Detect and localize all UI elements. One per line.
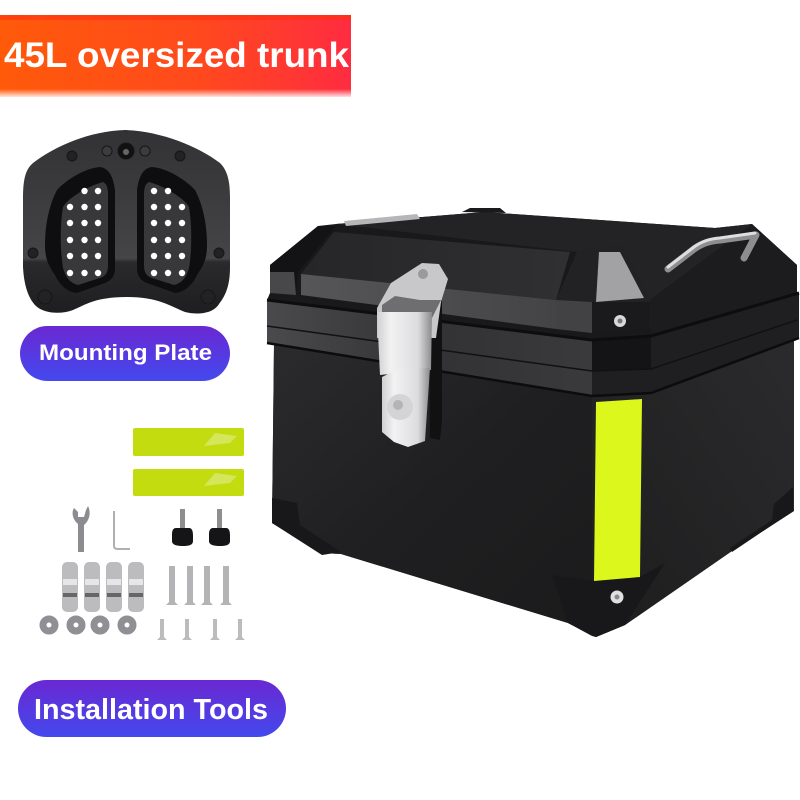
lid left corner: [270, 226, 336, 295]
yellow reflective strip: [594, 399, 642, 581]
lid side: [650, 224, 797, 335]
trunk body side: [592, 338, 794, 637]
lid corner wedge: [556, 246, 651, 333]
latch: [377, 263, 448, 447]
icon: nuts: [43, 619, 133, 631]
lid band: [267, 300, 592, 396]
top left handle: [344, 214, 420, 226]
lid top: [336, 212, 752, 300]
icon: wrench: [73, 506, 90, 552]
icon: keys: [172, 509, 230, 546]
icon: reflective stickers: [133, 428, 244, 496]
bottom corner guards: [272, 487, 793, 637]
trunk silhouette base: [267, 212, 799, 637]
icon: mounting plate: [23, 130, 230, 313]
right handle: [668, 233, 756, 269]
reflector: [596, 252, 644, 302]
label: Installation Tools: [18, 680, 286, 737]
plate bolts: [28, 143, 224, 304]
icon: allen key: [114, 511, 130, 549]
bottom screw: [610, 590, 624, 604]
banner: 45L oversized trunk: [0, 15, 351, 97]
lid screw: [614, 315, 626, 327]
top hinge: [462, 208, 506, 213]
label: Mounting Plate: [20, 326, 230, 381]
banner: 45L oversized trunk: 45L oversized trunk: [4, 36, 350, 75]
left recess: [45, 167, 115, 293]
icon: short screws: [157, 619, 245, 640]
lid front grey band: [301, 274, 556, 329]
icon: metal clips: [62, 562, 144, 612]
label: Installation Tools: Installation Tools: [34, 694, 268, 726]
icon: long screws: [166, 566, 232, 605]
label: Mounting Plate: Mounting Plate: [39, 340, 212, 365]
trunk body front: [272, 345, 592, 636]
plate perforation dots: [67, 188, 185, 276]
trunk: [267, 208, 799, 637]
right recess: [137, 167, 207, 293]
lid front face: [301, 232, 570, 300]
